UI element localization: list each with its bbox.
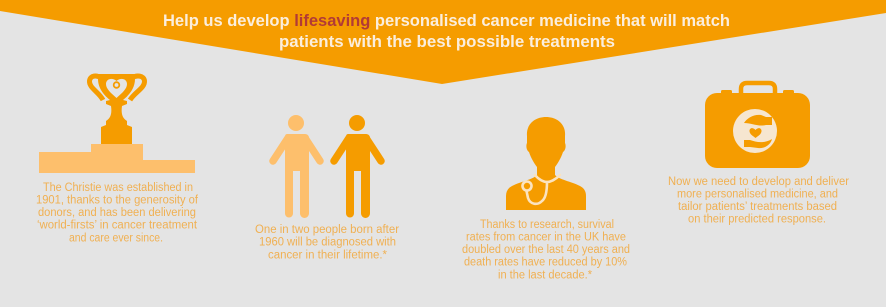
text: research: in the last decade.* [498,270,592,282]
panel: history [36,74,199,244]
text: diagnosis: cancer in their lifetime.* [268,250,388,262]
text: diagnosis [255,224,399,262]
text: history [36,182,199,244]
text: research: Thanks to research, survival [480,219,614,231]
heart ring [114,82,119,88]
icon: trophy on podium [39,74,195,173]
icon: light person [273,115,320,218]
text: research [462,219,630,282]
icon: medical briefcase [705,83,810,168]
text: personalised medicine: tailor patients’ treatments based [678,201,837,213]
text: personalised medicine: Now we need to develop and deliver [668,176,849,188]
trophy handles [89,76,145,100]
panel: personalised medicine [668,83,849,226]
text: personalised medicine [668,176,849,226]
text: history: 1901, thanks to the generosity of [36,194,199,206]
text: research: death rates have reduced by 10% [464,256,627,268]
stethoscope [522,175,560,204]
title [163,12,730,51]
trophy cup [98,74,135,144]
text: research: doubled over the last 40 years and [462,244,630,256]
header banner [0,0,886,84]
text: personalised medicine: more personalised medicine, and [677,188,838,200]
title: Help us develop lifesaving personalised cancer medicine that will match [163,12,730,30]
icon: hands and heart [744,115,772,148]
panel: diagnosis [255,115,399,262]
text: history: The Christie was established in [43,182,193,194]
icon: two people [273,115,381,218]
text: history: and care ever since. [69,232,163,244]
text: diagnosis: 1960 will be diagnosed with [259,236,396,248]
text: personalised medicine: on their predicted response. [688,214,826,226]
icon: dark person [334,115,381,218]
title: patients with the best possible treatments [279,33,615,51]
panel: research [462,117,630,282]
text: research: rates from cancer in the UK have [466,232,626,244]
text: history: ‘world-firsts’ in cancer treatment [37,220,198,232]
text: history: donors, and has been delivering [38,207,196,219]
icon: doctor with stethoscope [506,117,586,210]
text: diagnosis: One in two people born after [255,224,399,236]
